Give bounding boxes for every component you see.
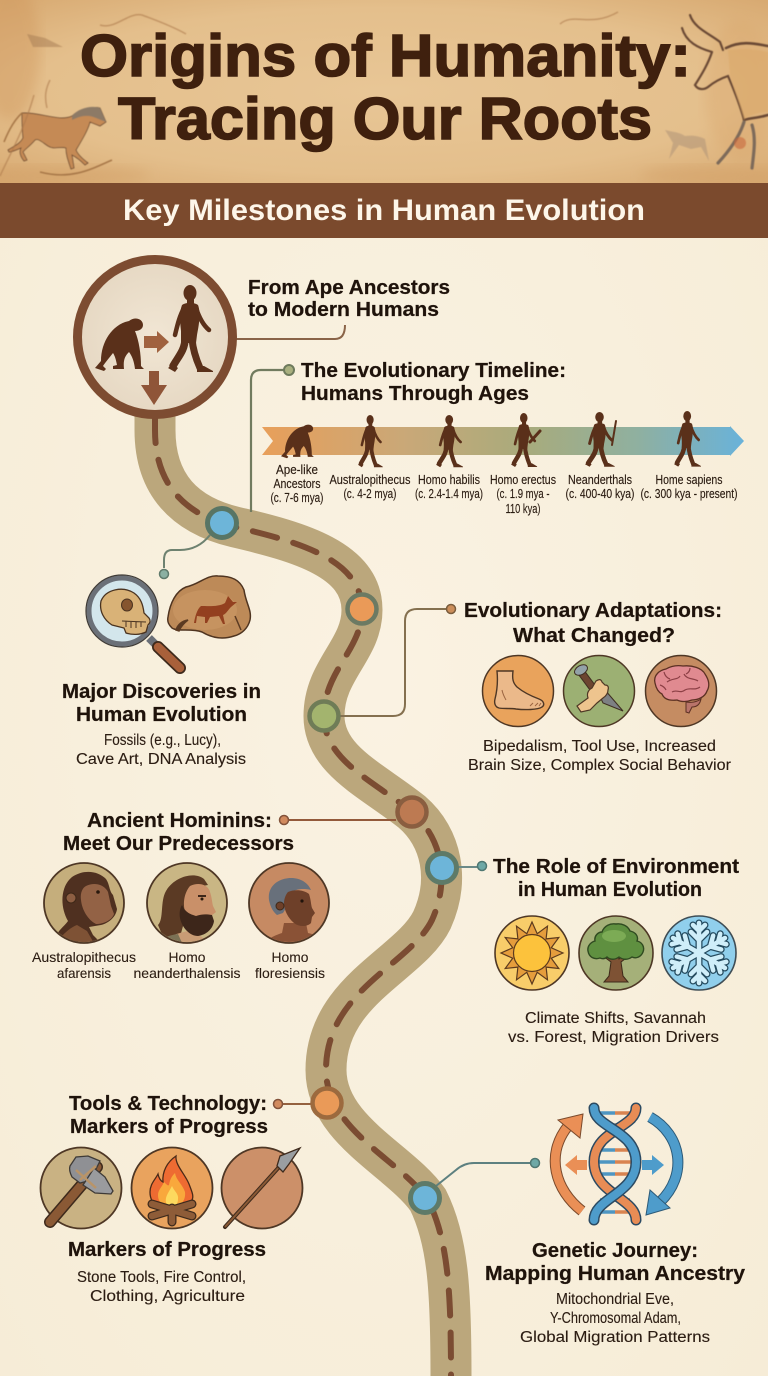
australopithecus [330, 415, 410, 501]
heading [63, 810, 294, 855]
connector [289, 819, 396, 821]
portrait labels: Homo [272, 949, 309, 965]
panel: ancient hominins [32, 798, 426, 981]
ape-like ancestors [270, 425, 324, 505]
heading [69, 1093, 268, 1138]
body text: Brain Size, Complex Social Behavior [468, 757, 731, 774]
neanderthals [566, 412, 634, 501]
neanderthals: (c. 400-40 kya) [566, 487, 634, 501]
node 1: blue [208, 508, 236, 538]
connector [458, 866, 478, 868]
portrait labels: neanderthalensis [134, 965, 240, 981]
australopithecus: (c. 4-2 mya) [344, 487, 396, 501]
body text: Fossils (e.g., Lucy), [104, 732, 221, 749]
orange migration arrows [555, 1126, 582, 1211]
subtitle band: Key Milestones in Human Evolution [123, 194, 645, 227]
timeline arrow [262, 426, 744, 456]
icon: stone axe [40, 1148, 122, 1228]
node 6: orange [312, 1088, 342, 1118]
panel: genetic journey [410, 1108, 746, 1346]
homo sapiens: Home sapiens [656, 473, 722, 487]
heading: The Role of Environment [493, 856, 739, 878]
icon: ape to human [78, 260, 232, 414]
body text: Bipedalism, Tool Use, Increased [483, 738, 716, 755]
body text: Y-Chromosomal Adam, [550, 1310, 681, 1327]
australopithecus: Australopithecus [330, 473, 410, 487]
portrait: homo neanderthalensis [147, 863, 227, 945]
subheading: Markers of Progress [68, 1239, 266, 1261]
milestone: from ape ancestors [78, 260, 450, 414]
heading: Humans Through Ages [301, 383, 529, 405]
heading [493, 856, 739, 901]
body text: Cave Art, DNA Analysis [76, 751, 246, 768]
heading: From Ape Ancestors [248, 277, 450, 299]
homo sapiens: (c. 300 kya - present) [640, 487, 738, 501]
portrait labels [32, 949, 325, 981]
connector [236, 325, 345, 339]
subtitle band [0, 183, 768, 238]
portrait: homo floresiensis [249, 863, 329, 945]
node 5: blue [428, 854, 456, 882]
heading [301, 360, 566, 405]
body text: Climate Shifts, Savannah [525, 1010, 706, 1027]
icon: magnifying glass over skull [86, 575, 180, 668]
heading: to Modern Humans [248, 299, 439, 321]
title: Tracing Our Roots [118, 86, 652, 152]
neanderthals: Neanderthals [568, 473, 632, 487]
homo erectus: 110 kya) [506, 502, 540, 516]
body text: vs. Forest, Migration Drivers [508, 1029, 719, 1046]
heading: Tools & Technology: [69, 1093, 267, 1115]
node 3: green [310, 702, 338, 730]
portrait labels: afarensis [57, 965, 111, 981]
homo habilis: (c. 2.4-1.4 mya) [415, 487, 483, 501]
panel: evolutionary timeline [251, 360, 744, 516]
body text [508, 1010, 719, 1046]
homo erectus [490, 413, 556, 516]
portrait labels: Homo [168, 949, 206, 965]
connector [251, 370, 285, 512]
node 4: brown [398, 798, 426, 826]
icon: spear [222, 1148, 302, 1228]
body text: Mitochondrial Eve, [556, 1291, 674, 1308]
title: Origins of Humanity: [80, 23, 691, 89]
body text [76, 732, 246, 768]
panel: major discoveries [62, 575, 261, 768]
ape-like ancestors: Ape-like [276, 463, 318, 477]
heading: Mapping Human Ancestry [485, 1263, 746, 1285]
icon: sun [495, 916, 569, 990]
body text [77, 1269, 246, 1305]
panel: tools and technology [40, 1088, 342, 1305]
heading: What Changed? [513, 625, 675, 647]
winding road path [155, 405, 451, 1376]
homo erectus: (c. 1.9 mya - [496, 487, 550, 501]
icon: hand with stone tool [564, 656, 634, 726]
panel: role of environment [428, 854, 739, 1046]
connector [436, 1163, 530, 1186]
cave painting: horse [0, 12, 618, 176]
body text [520, 1291, 710, 1346]
body text [468, 738, 731, 774]
node 7: blue [410, 1184, 440, 1212]
heading: Human Evolution [76, 704, 247, 726]
ape-like ancestors: (c. 7-6 mya) [270, 491, 324, 505]
heading [248, 277, 450, 321]
heading: Evolutionary Adaptations: [464, 600, 722, 622]
heading [62, 681, 261, 726]
icon: brain [646, 656, 716, 726]
portrait: australopithecus afarensis [44, 863, 124, 945]
icon: dna helix with arrows [555, 1108, 678, 1220]
rungs [598, 1113, 632, 1212]
portrait labels: floresiensis [255, 965, 325, 981]
body text: Clothing, Agriculture [90, 1288, 245, 1305]
connector [340, 609, 447, 716]
homo erectus: Homo erectus [490, 473, 556, 487]
connector [283, 1103, 311, 1105]
homo sapiens [640, 411, 738, 501]
node 2: orange [348, 594, 376, 624]
icon: tree [579, 916, 653, 990]
cave painting: ibex [682, 15, 768, 168]
heading: Genetic Journey: [532, 1240, 698, 1262]
ape-like ancestors: Ancestors [274, 477, 320, 491]
heading: Markers of Progress [70, 1116, 268, 1138]
header banner with cave paintings [0, 0, 768, 185]
heading: in Human Evolution [518, 879, 702, 901]
icon: snowflake [662, 916, 736, 990]
title [80, 23, 691, 152]
heading: Major Discoveries in [62, 681, 261, 703]
heading: Ancient Hominins: [87, 810, 272, 832]
node dot: discoveries [160, 570, 168, 578]
homo habilis [415, 415, 483, 501]
node 1 connector to discoveries [164, 535, 210, 568]
heading: The Evolutionary Timeline: [301, 360, 566, 382]
icon: fire [132, 1148, 212, 1228]
heading [464, 600, 722, 647]
icon: foot [482, 656, 554, 726]
heading: Meet Our Predecessors [63, 833, 294, 855]
blue migration arrows [650, 1117, 678, 1202]
body text: Global Migration Patterns [520, 1329, 710, 1346]
heading [485, 1240, 746, 1285]
body text: Stone Tools, Fire Control, [77, 1269, 246, 1286]
homo habilis: Homo habilis [418, 473, 480, 487]
panel: evolutionary adaptations [310, 600, 731, 774]
portrait labels: Australopithecus [32, 949, 136, 965]
icon: cave art rock [168, 576, 250, 638]
